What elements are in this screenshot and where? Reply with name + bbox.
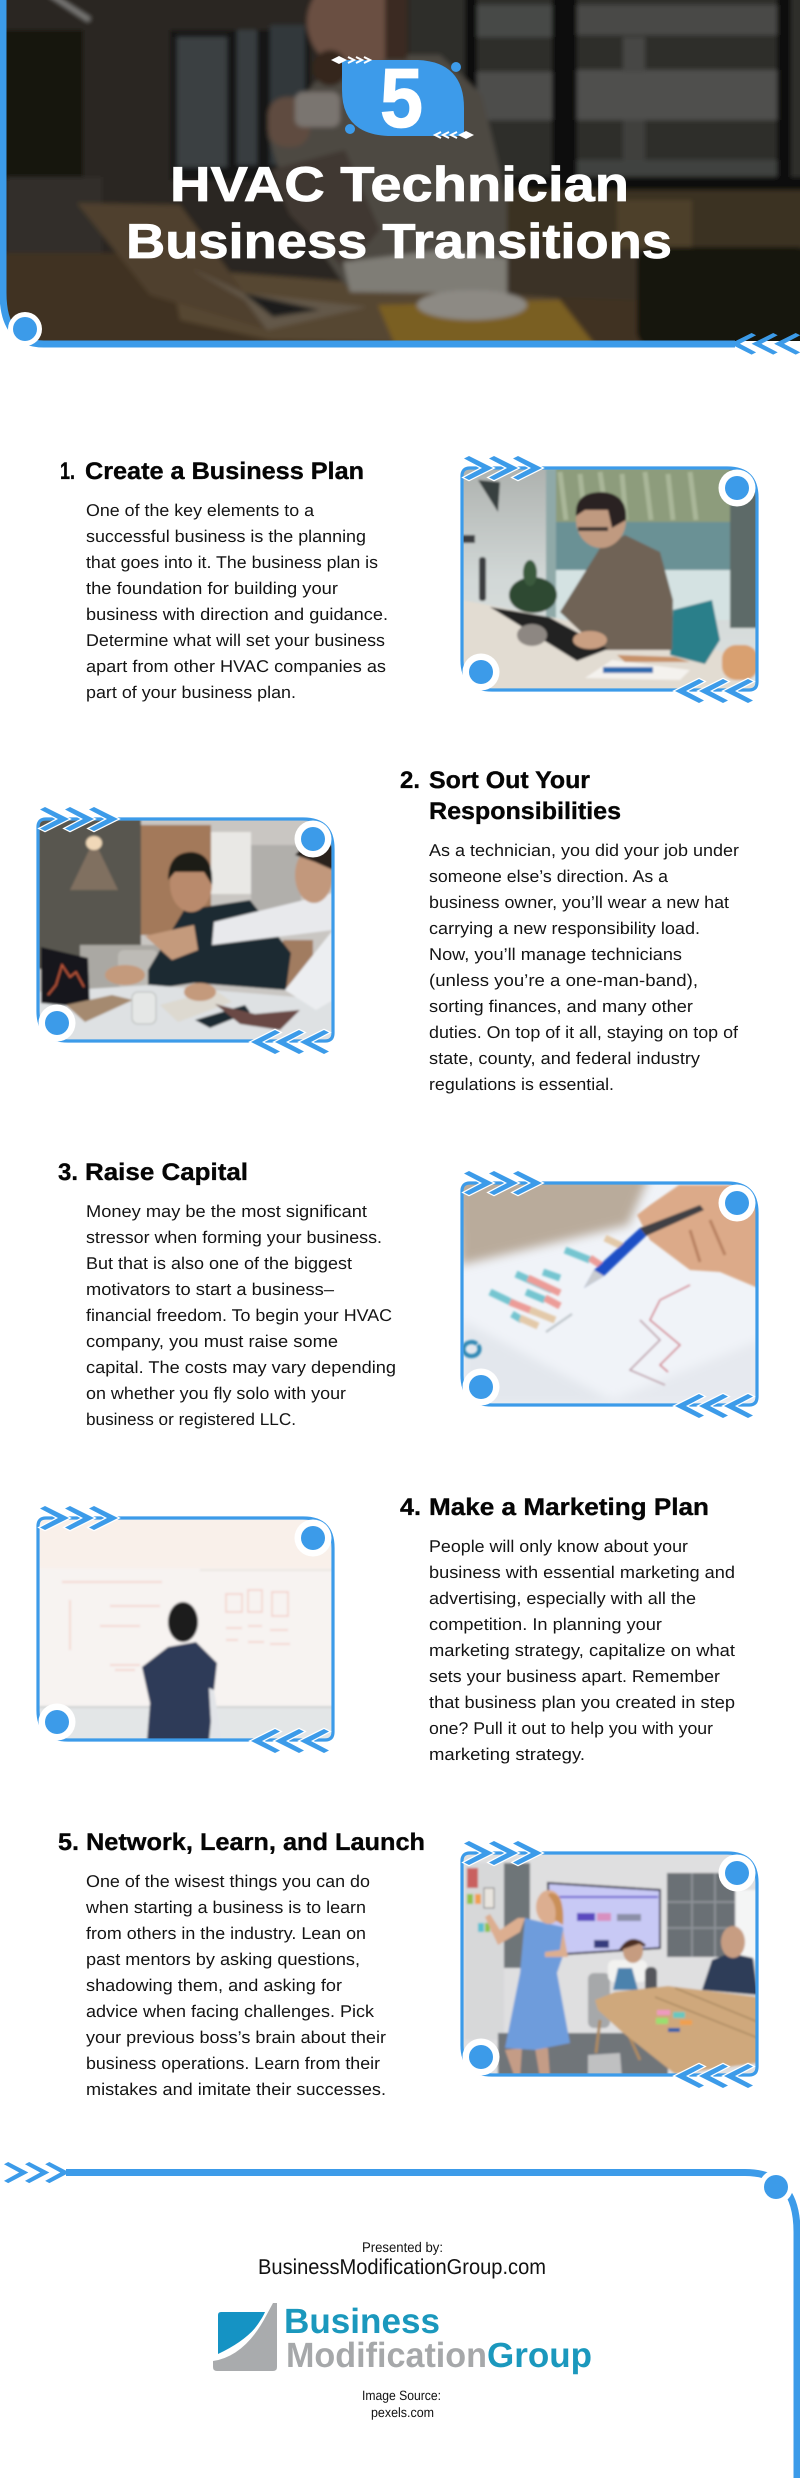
banner chevrons [730, 333, 800, 355]
presented by: Presented by: [362, 2239, 443, 2255]
body text: One of the key elements to a [86, 501, 315, 520]
body text: marketing strategy. [429, 1745, 585, 1764]
body text: motivators to start a business– [86, 1280, 335, 1299]
heading: Sort Out Your [429, 767, 590, 794]
heading: Responsibilities [429, 798, 621, 825]
body text: apart from other HVAC companies as [86, 657, 386, 676]
body text: Now, you’ll manage technicians [429, 945, 682, 964]
body text: shadowing them, and asking for [86, 1976, 342, 1995]
banner corner dot [8, 312, 42, 346]
body text: duties. On top of it all, staying on top of [429, 1023, 738, 1042]
body text: business operations. Learn from their [86, 2054, 380, 2073]
body text: financial freedom. To begin your HVAC [86, 1306, 392, 1325]
logo mark [213, 2303, 277, 2371]
body text: from others in the industry. Lean on [86, 1924, 366, 1943]
body text [86, 501, 388, 702]
heading [400, 767, 621, 825]
body text: business with essential marketing and [429, 1563, 735, 1582]
photo frame with dots and chevrons [462, 456, 757, 703]
presented by: BusinessModificationGroup.com [258, 2255, 546, 2279]
logo wordmark: Group [487, 2336, 592, 2375]
body text: Money may be the most significant [86, 1202, 367, 1221]
footer border line [66, 2172, 797, 2478]
body text: regulations is essential. [429, 1075, 614, 1094]
panel: step 1 create a business plan [60, 456, 760, 703]
presented by [258, 2239, 546, 2279]
body text: As a technician, you did your job under [429, 841, 739, 860]
heading: 1. [60, 458, 75, 485]
body text: marketing strategy, capitalize on what [429, 1641, 735, 1660]
body text [429, 841, 739, 1094]
body text [429, 1537, 735, 1764]
body text: But that is also one of the biggest [86, 1254, 352, 1273]
heading: 4. [400, 1494, 421, 1521]
photo frame with dots and chevrons [462, 1841, 757, 2088]
panel: step 2 sort out your responsibilities [38, 767, 739, 1094]
body text: part of your business plan. [86, 683, 296, 702]
panel: step 4 make a marketing plan [38, 1494, 735, 1764]
photo: colleagues at a meeting table [38, 819, 333, 1045]
heading: 2. [400, 767, 420, 794]
photo: presenter in a meeting room [462, 1853, 758, 2078]
body text: your previous boss’s brain about their [86, 2028, 386, 2047]
body text: stressor when forming your business. [86, 1228, 382, 1247]
image source: Image Source: [362, 2388, 441, 2403]
logo wordmark: Business [284, 2302, 440, 2341]
body text: company, you must raise some [86, 1332, 338, 1351]
heading: Make a Marketing Plan [429, 1494, 709, 1521]
body text: someone else’s direction. As a [429, 867, 669, 886]
title: Business Transitions [126, 215, 672, 269]
badge with number 5 [331, 51, 474, 145]
header banner [0, 0, 800, 355]
title: HVAC Technician [170, 158, 629, 212]
banner border [3, 0, 735, 344]
body text: business owner, you’ll wear a new hat [429, 893, 729, 912]
body text: Determine what will set your business [86, 631, 385, 650]
heading: Network, Learn, and Launch [86, 1829, 425, 1856]
image source [362, 2388, 441, 2420]
body text: that goes into it. The business plan is [86, 553, 378, 572]
panel: step 5 network, learn, and launch [58, 1829, 758, 2099]
footer chevrons [4, 2162, 70, 2183]
logo wordmark: Modification [286, 2336, 487, 2375]
hero photo: man with coffee at a laptop [0, 0, 800, 355]
body text: on whether you fly solo with your [86, 1384, 346, 1403]
title [126, 158, 672, 269]
photo: hand with pen over financial charts [455, 1175, 760, 1405]
body text: carrying a new responsibility load. [429, 919, 700, 938]
body text: One of the wisest things you can do [86, 1872, 370, 1891]
body text [86, 1202, 396, 1429]
panel: step 3 raise capital [58, 1159, 760, 1429]
body text: past mentors by asking questions, [86, 1950, 360, 1969]
body text: capital. The costs may vary depending [86, 1358, 396, 1377]
photo: man working on laptop [462, 468, 760, 700]
footer corner dot [759, 2170, 793, 2204]
body text: the foundation for building your [86, 579, 338, 598]
body text [85, 1872, 386, 2099]
badge with number 5: 5 [380, 51, 423, 145]
body text: successful business is the planning [86, 527, 366, 546]
body text: state, county, and federal industry [429, 1049, 701, 1068]
logo: Business Modification Group [213, 2302, 592, 2375]
body text: sets your business apart. Remember [429, 1667, 720, 1686]
body text: when starting a business is to learn [85, 1898, 366, 1917]
body text: sorting finances, and many other [429, 997, 693, 1016]
photo frame with dots and chevrons [38, 1506, 333, 1753]
image source: pexels.com [371, 2405, 434, 2420]
body text: (unless you’re a one-man-band), [429, 971, 698, 990]
body text: competition. In planning your [429, 1615, 662, 1634]
photo frame with dots and chevrons [462, 1171, 757, 1418]
body text: business with direction and guidance. [86, 605, 388, 624]
body text: one? Pull it out to help you with your [429, 1719, 713, 1738]
logo wordmark [284, 2302, 592, 2375]
body text: business or registered LLC. [86, 1410, 296, 1429]
body text: People will only know about your [429, 1537, 688, 1556]
photo: man at a whiteboard [38, 1518, 333, 1741]
body text: mistakes and imitate their successes. [86, 2080, 386, 2099]
heading: Create a Business Plan [85, 458, 364, 485]
heading: 3. [58, 1159, 78, 1186]
body text: that business plan you created in step [429, 1693, 735, 1712]
body text: advice when facing challenges. Pick [86, 2002, 375, 2021]
heading: Raise Capital [85, 1159, 248, 1186]
heading: 5. [58, 1829, 79, 1856]
photo frame with dots and chevrons [38, 807, 333, 1054]
body text: advertising, especially with all the [429, 1589, 696, 1608]
footer [4, 2162, 797, 2478]
